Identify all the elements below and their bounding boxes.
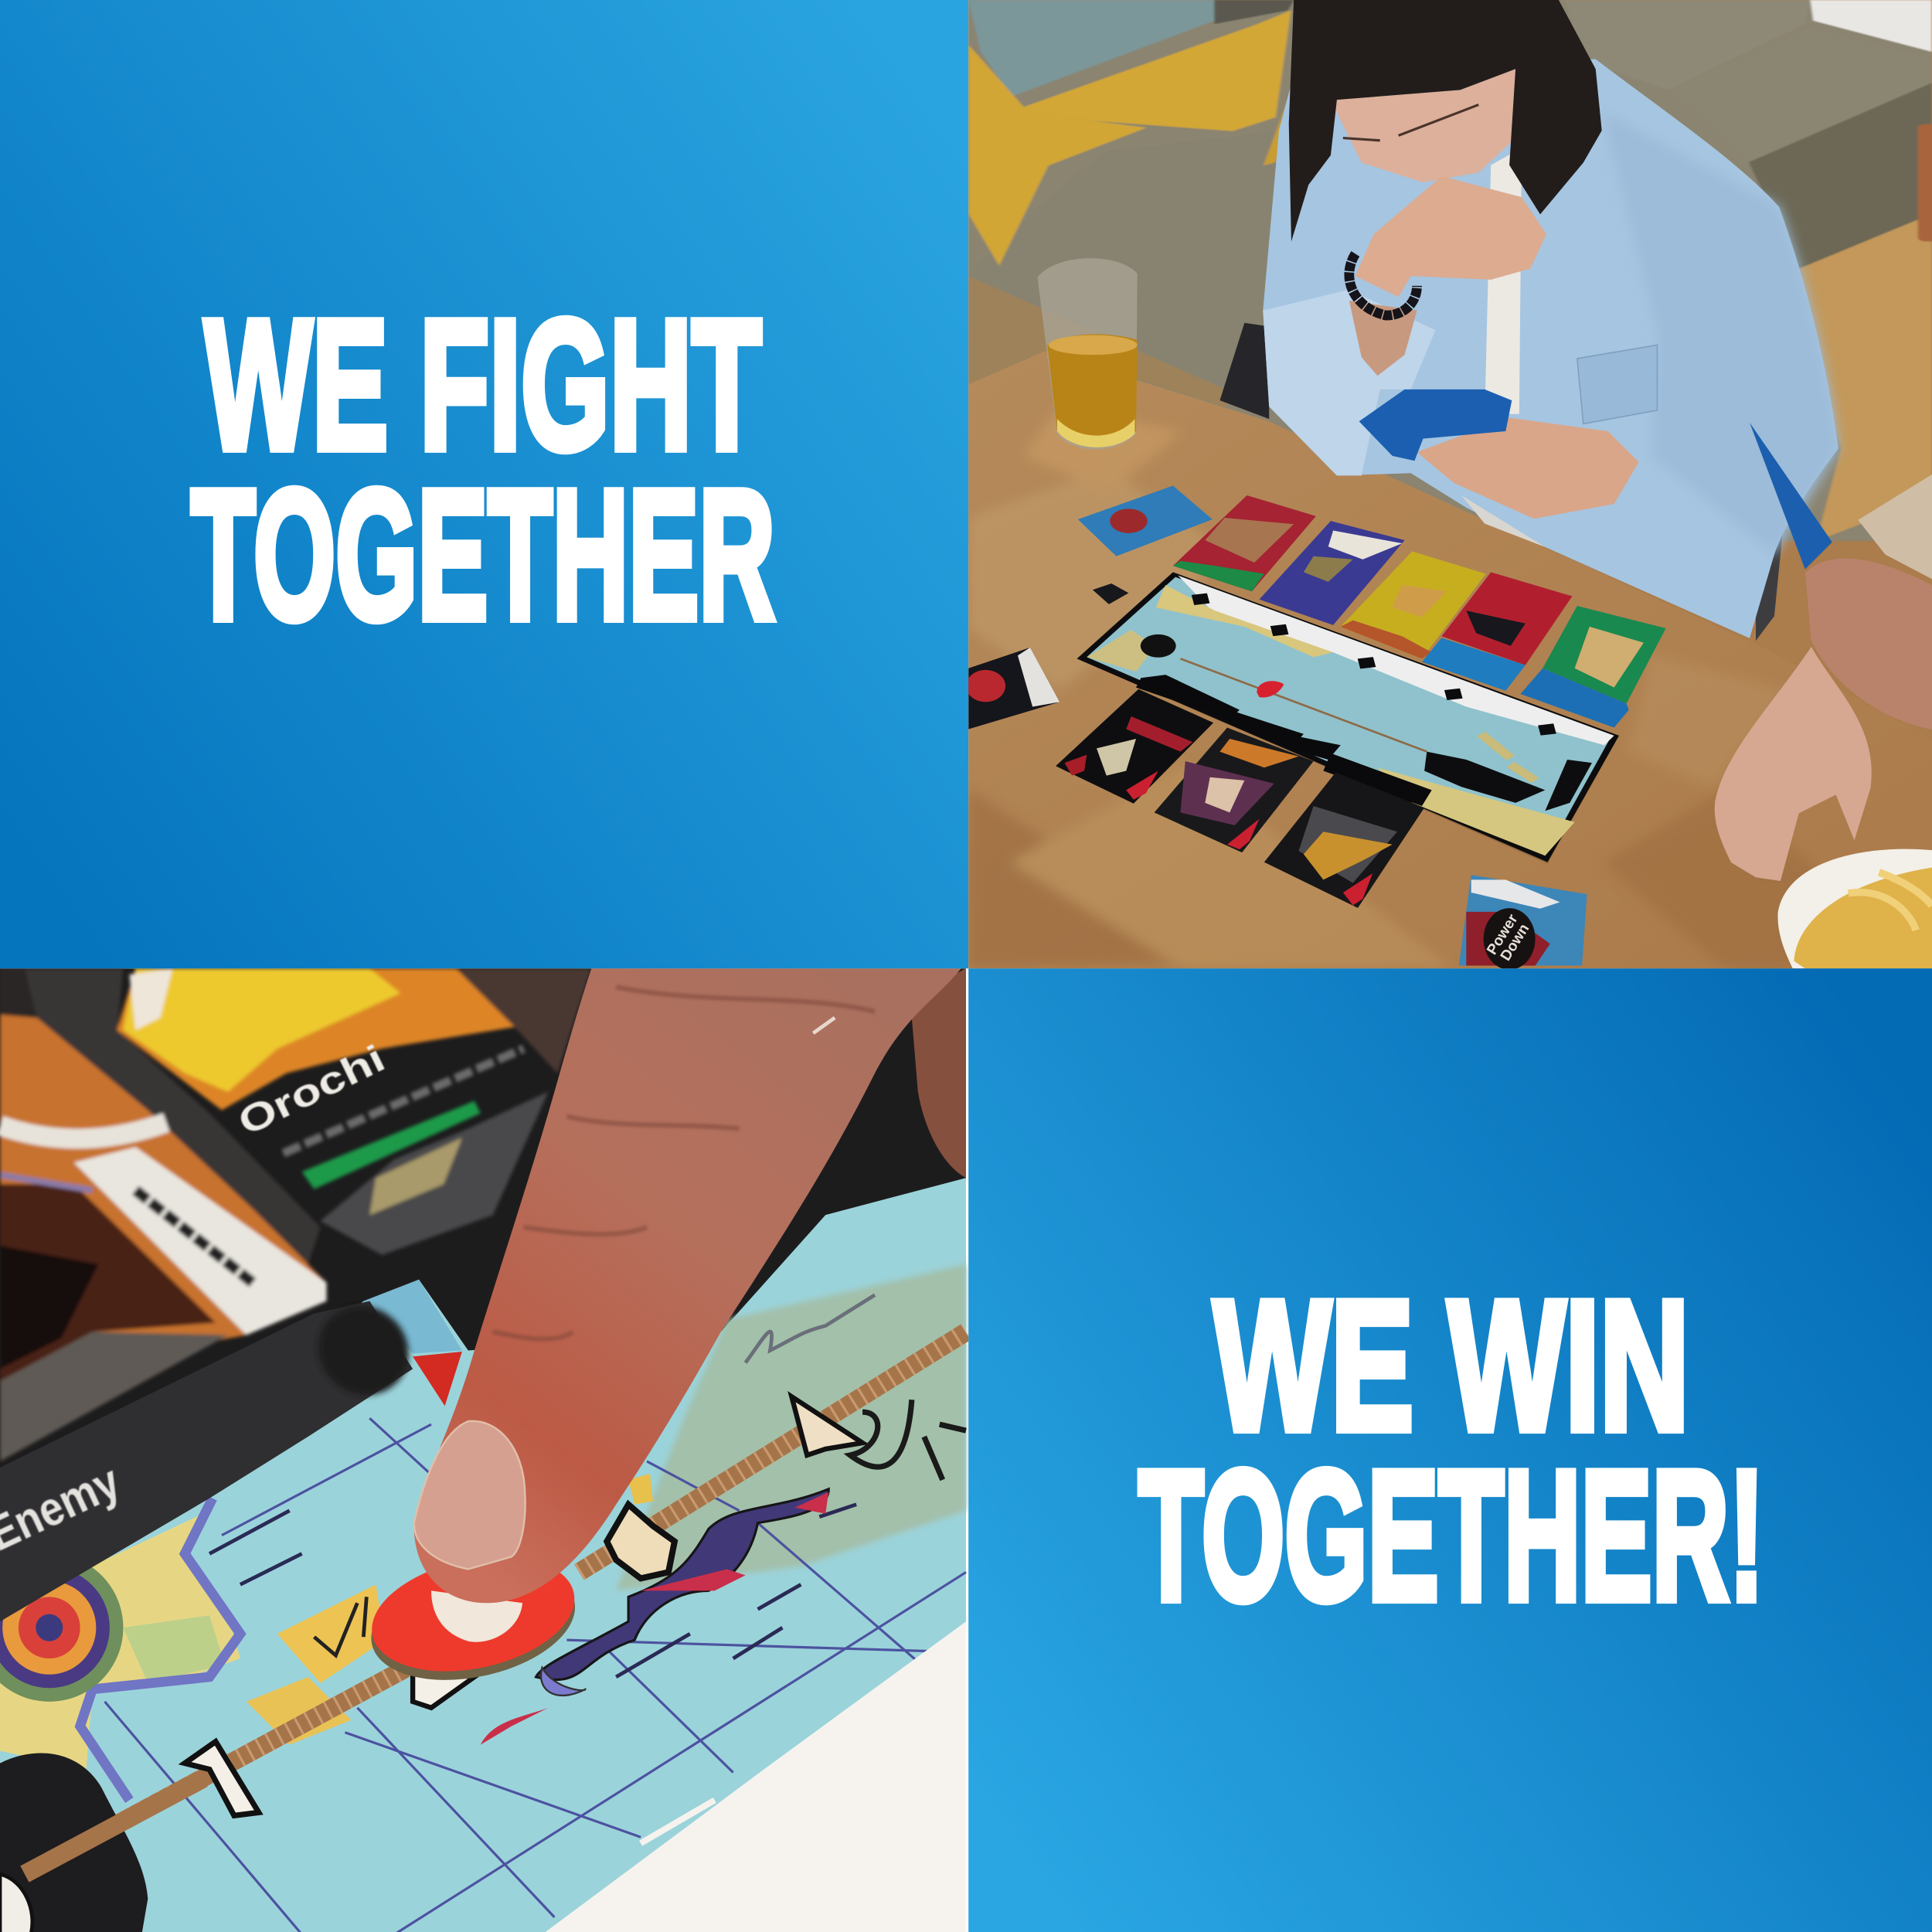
enemy card: foxy	[1155, 727, 1314, 852]
enemy card: judge	[1264, 773, 1424, 908]
hair	[1289, 0, 1602, 241]
heading: we win together	[1138, 1262, 1764, 1639]
red token	[361, 1539, 586, 1697]
ink figure	[791, 1396, 862, 1455]
fanned cards in hand	[1359, 389, 1512, 461]
enemy tabs	[1136, 675, 1240, 719]
enemy label strip	[0, 1287, 462, 1621]
raised hand	[1355, 176, 1546, 297]
loose card: robin	[1078, 486, 1213, 556]
character card: yellow	[1341, 551, 1486, 658]
die	[1093, 583, 1128, 604]
enemy card: rob lucci	[1056, 689, 1213, 804]
heading: we fight together	[191, 281, 775, 658]
cape	[536, 1489, 828, 1680]
afro silhouette	[0, 1753, 148, 1932]
glass of beer	[1037, 258, 1138, 450]
character card: purple	[1259, 521, 1405, 625]
wood grain	[968, 416, 1809, 968]
board	[1077, 572, 1619, 862]
finger	[414, 968, 966, 1603]
black blobs	[1141, 634, 1176, 658]
second player arm and hands	[1715, 423, 1932, 881]
character card: monkey	[1173, 495, 1316, 591]
panel: close-up photo of finger moving a token	[0, 968, 966, 1932]
rope over afro	[25, 1778, 203, 1874]
loose card: power up	[966, 648, 1060, 730]
bowl of chips	[1777, 849, 1932, 968]
chair	[1219, 323, 1269, 419]
number tile	[185, 1742, 259, 1815]
blurred cards at the top	[0, 968, 591, 1461]
hand holding cards	[1417, 417, 1639, 519]
left forearm	[1349, 301, 1417, 376]
card name: orochi: Orochi	[232, 1036, 391, 1144]
map	[0, 1178, 966, 1932]
panel: photo of players at the table	[966, 0, 1932, 970]
shirt pocket	[1577, 345, 1657, 423]
white board margin	[543, 1621, 966, 1932]
shirt	[1263, 60, 1838, 638]
white tee	[1485, 148, 1522, 414]
card text: power down: Down	[1498, 921, 1532, 964]
rolled sleeve	[1263, 290, 1435, 475]
card text: power down	[1484, 908, 1536, 970]
panel: we win together	[968, 968, 1932, 1932]
character card: green	[1520, 606, 1666, 727]
game layout	[966, 486, 1666, 965]
heading: we fight together: TOGETHER	[191, 451, 775, 658]
card text: power down: Power	[1484, 911, 1522, 957]
handwritten place name	[746, 1295, 875, 1362]
heading: we win together: WE WIN	[1213, 1262, 1689, 1468]
loose card: power down	[1459, 875, 1587, 965]
sofa and room background	[968, 0, 1932, 541]
shadows under cards	[1077, 572, 1619, 864]
pawn	[1257, 681, 1284, 697]
yellow islands	[277, 1584, 385, 1683]
dice on board	[1192, 594, 1556, 736]
character card: red	[1422, 572, 1572, 691]
fingernail	[414, 1421, 526, 1569]
land with compass	[0, 1511, 240, 1770]
bracelet	[1349, 253, 1417, 315]
heading: we fight together: WE FIGHT	[205, 281, 761, 488]
figure under token	[413, 1671, 474, 1708]
grid lines	[105, 1418, 966, 1932]
face	[1331, 69, 1515, 182]
panel: we fight together	[0, 0, 968, 968]
rope track	[25, 1332, 966, 1874]
woman	[1263, 0, 1838, 638]
table top	[968, 351, 1805, 969]
rope track	[1180, 658, 1427, 752]
